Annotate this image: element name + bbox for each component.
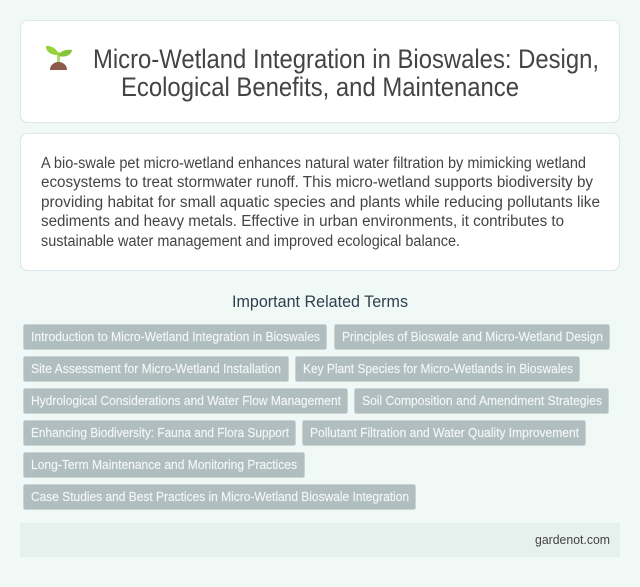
tag list (24, 324, 610, 510)
panel: intro text: providing habitat for small aquatic species and plants while reducing pollutants like (41, 194, 600, 211)
tag: Soil Composition and Amendment Strategies (362, 393, 602, 408)
tag: Enhancing Biodiversity: Fauna and Flora Support (31, 425, 289, 440)
title: Micro-Wetland Integration in Bioswales: Design, (93, 44, 599, 74)
tag: Site Assessment for Micro-Wetland Installation (31, 361, 281, 376)
tag: Principles of Bioswale and Micro-Wetland Design (342, 329, 603, 344)
tag (24, 324, 326, 350)
icon: sprout (46, 46, 72, 70)
tag: Case Studies and Best Practices in Micro-Wetland Bioswale Integration (31, 489, 409, 504)
title: Ecological Benefits, and Maintenance (121, 72, 519, 102)
tag: Key Plant Species for Micro-Wetlands in Bioswales (303, 361, 573, 376)
panel: intro text: sustainable water management and improved ecological balance. (41, 233, 460, 250)
panel: intro text: ecosystems to treat stormwater runoff. This micro-wetland supports biodiversity by (41, 174, 593, 191)
tag (24, 420, 296, 446)
footer (20, 523, 620, 557)
tag: Introduction to Micro-Wetland Integration in Bioswales (31, 329, 320, 344)
panel: intro text (20, 134, 620, 270)
panel: intro text: A bio-swale pet micro-wetland enhances natural water filtration by mimicking wetland (41, 155, 586, 172)
panel: intro text: sediments and heavy metals. Effective in urban environments, it contributes to (41, 213, 564, 230)
heading: related terms: Important Related Terms (232, 293, 408, 311)
tag (24, 388, 348, 414)
tag: Long-Term Maintenance and Monitoring Practices (31, 457, 297, 472)
tag (302, 420, 586, 446)
title (93, 44, 599, 102)
tag: Pollutant Filtration and Water Quality Improvement (310, 425, 579, 440)
tag (24, 356, 288, 382)
tag (24, 452, 304, 478)
panel: title card (20, 20, 620, 122)
tag (354, 388, 608, 414)
tag: Hydrological Considerations and Water Flow Management (31, 393, 341, 408)
footer: gardenot.com (535, 532, 610, 547)
tag (24, 484, 416, 510)
tag (334, 324, 610, 350)
tag (296, 356, 580, 382)
